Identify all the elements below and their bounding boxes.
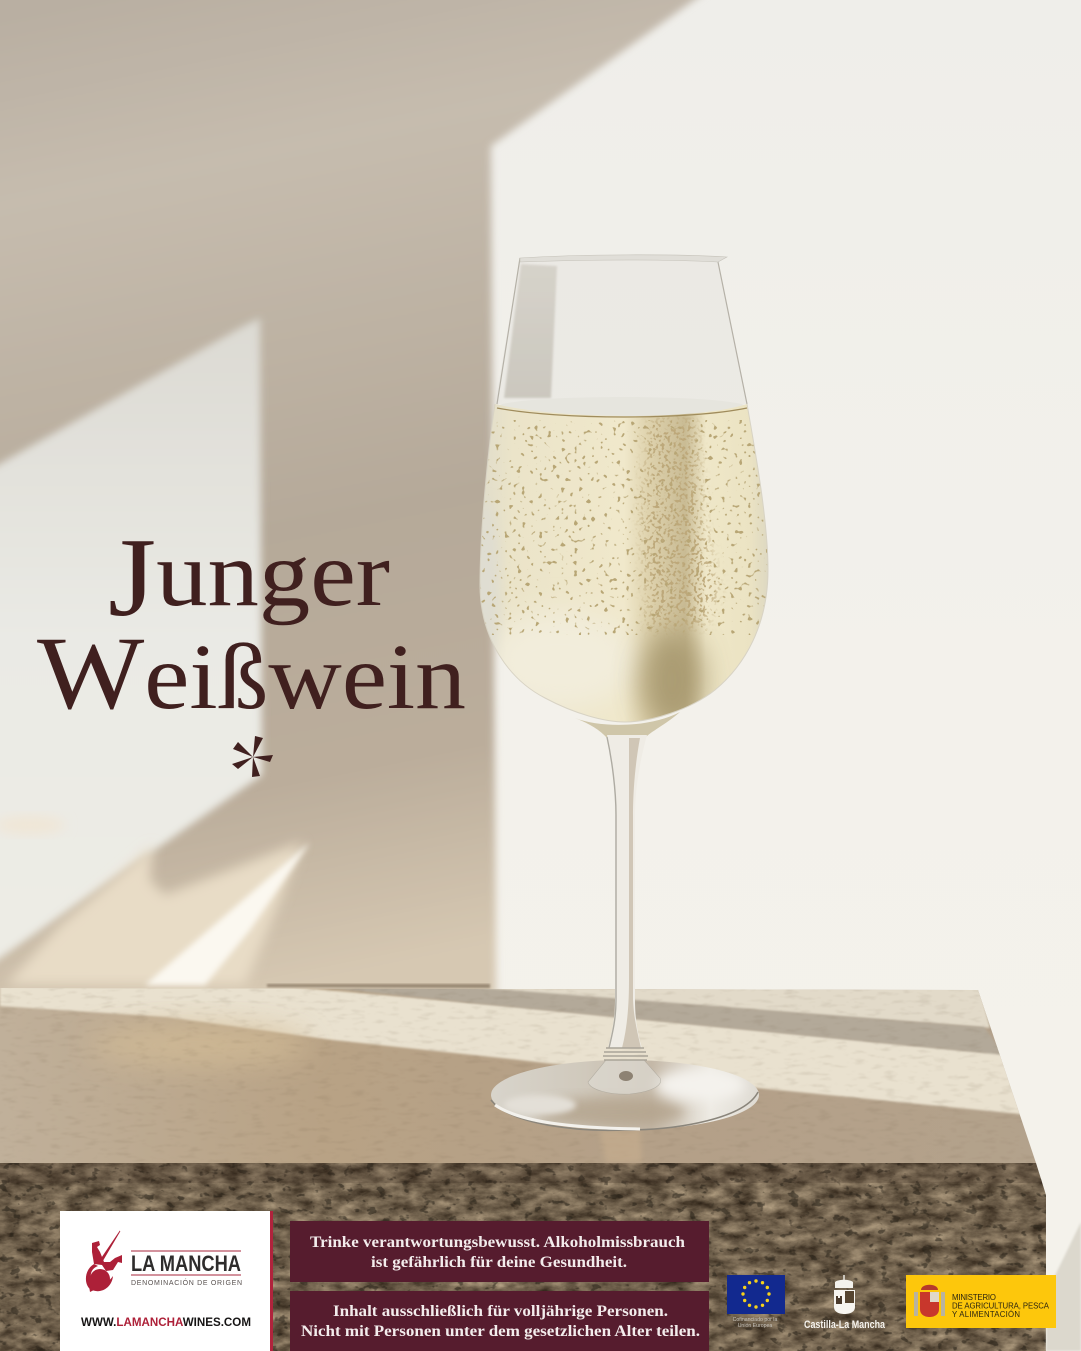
panel: age notice [290,1291,709,1351]
panel: ministry logo [906,1275,1056,1328]
stem knop cone [588,1060,661,1094]
panel: responsibility notice [290,1221,709,1282]
golden reflection [90,1023,310,1067]
glass foot [491,1060,759,1130]
pale wine bottom [485,610,635,710]
sparse bubbles [478,420,770,635]
ministry text [952,1293,1050,1319]
icon: coat of arms [914,1285,945,1317]
title line 1: J [108,516,156,640]
ministry text: DE AGRICULTURA, PESCA [952,1302,1050,1310]
dark wine shade [640,630,704,730]
table top surface [0,985,1081,1165]
stem right band [622,738,641,1048]
foot rim [491,1092,758,1130]
title [37,516,466,731]
wine surface [497,397,747,417]
warm light reflection on wall [6,842,302,985]
rim [520,255,727,262]
logo rule top [131,1250,241,1252]
bowl left reflection [504,264,557,398]
ministry text: Y ALIMENTACIÓN [952,1310,1020,1319]
table front face [0,1163,1081,1351]
shield [834,1290,855,1314]
foot shadow and stem reflection [600,1130,642,1163]
shield right quarter [845,1291,854,1303]
logo rule bottom [131,1274,241,1276]
wine glass [474,255,770,1163]
card accent [270,1211,273,1351]
EU caption: Cofinanciado por la [733,1317,777,1323]
stem left edge [607,737,616,1048]
upper glass bowl [495,257,747,404]
age line 2: Nicht mit Personen unter dem gesetzlichen Alter teilen. [301,1323,700,1340]
wine surface line [497,408,747,417]
logo wordmark: LA MANCHA [131,1251,241,1276]
ministry text: MINISTERIO [952,1293,996,1302]
EU stars [741,1279,771,1309]
stone speckle [2,988,1014,1150]
icon: knight on horse [86,1231,122,1292]
warm glow on light patch [0,816,65,834]
foot highlight [495,1105,640,1129]
dense bubble column [636,416,724,632]
icon: Castilla-La Mancha emblem [804,1275,886,1331]
notice line 2: ist gefährlich für deine Gesundheit. [371,1254,627,1271]
wall shadow bottom right [1046,1222,1081,1351]
wine body [474,396,770,730]
stem knop rings [603,1048,648,1060]
notice line 1: Trinke verantwortungsbewusst. Alkoholmissbrauch [310,1234,685,1251]
age line 1: Inhalt ausschließlich für volljährige Personen. [333,1303,668,1320]
title line 2: Weißwein [37,616,466,731]
bright light streak [145,842,310,985]
logo subtitle: DENOMINACIÓN DE ORIGEN [131,1278,242,1287]
stone table [0,985,1081,1351]
EU caption [733,1317,777,1329]
website: WWW.LAMANCHAWINES.COM [81,1317,251,1329]
bowl outline [480,404,768,722]
castle [836,1296,842,1304]
EU caption: Unión Europea [738,1323,772,1329]
crown [835,1275,853,1288]
stem [607,735,647,1048]
wall shadow [0,0,722,995]
pale left edge [482,546,494,642]
lit band across the table [0,985,1040,1116]
panel: La Mancha logo card [60,1211,273,1351]
table shadow band [340,988,1000,1056]
icon: asterisk [232,736,273,777]
contact shadow at wall base [267,984,490,988]
window light patch [0,318,262,972]
bowl base [575,712,680,738]
bowl glass edge [497,258,747,404]
foot tones [504,1069,745,1127]
knop centre [619,1071,633,1081]
emblem label: Castilla-La Mancha [804,1319,886,1331]
far table band right [483,989,990,1029]
icon: EU flag [727,1275,785,1329]
title line 1: unger [156,523,390,626]
